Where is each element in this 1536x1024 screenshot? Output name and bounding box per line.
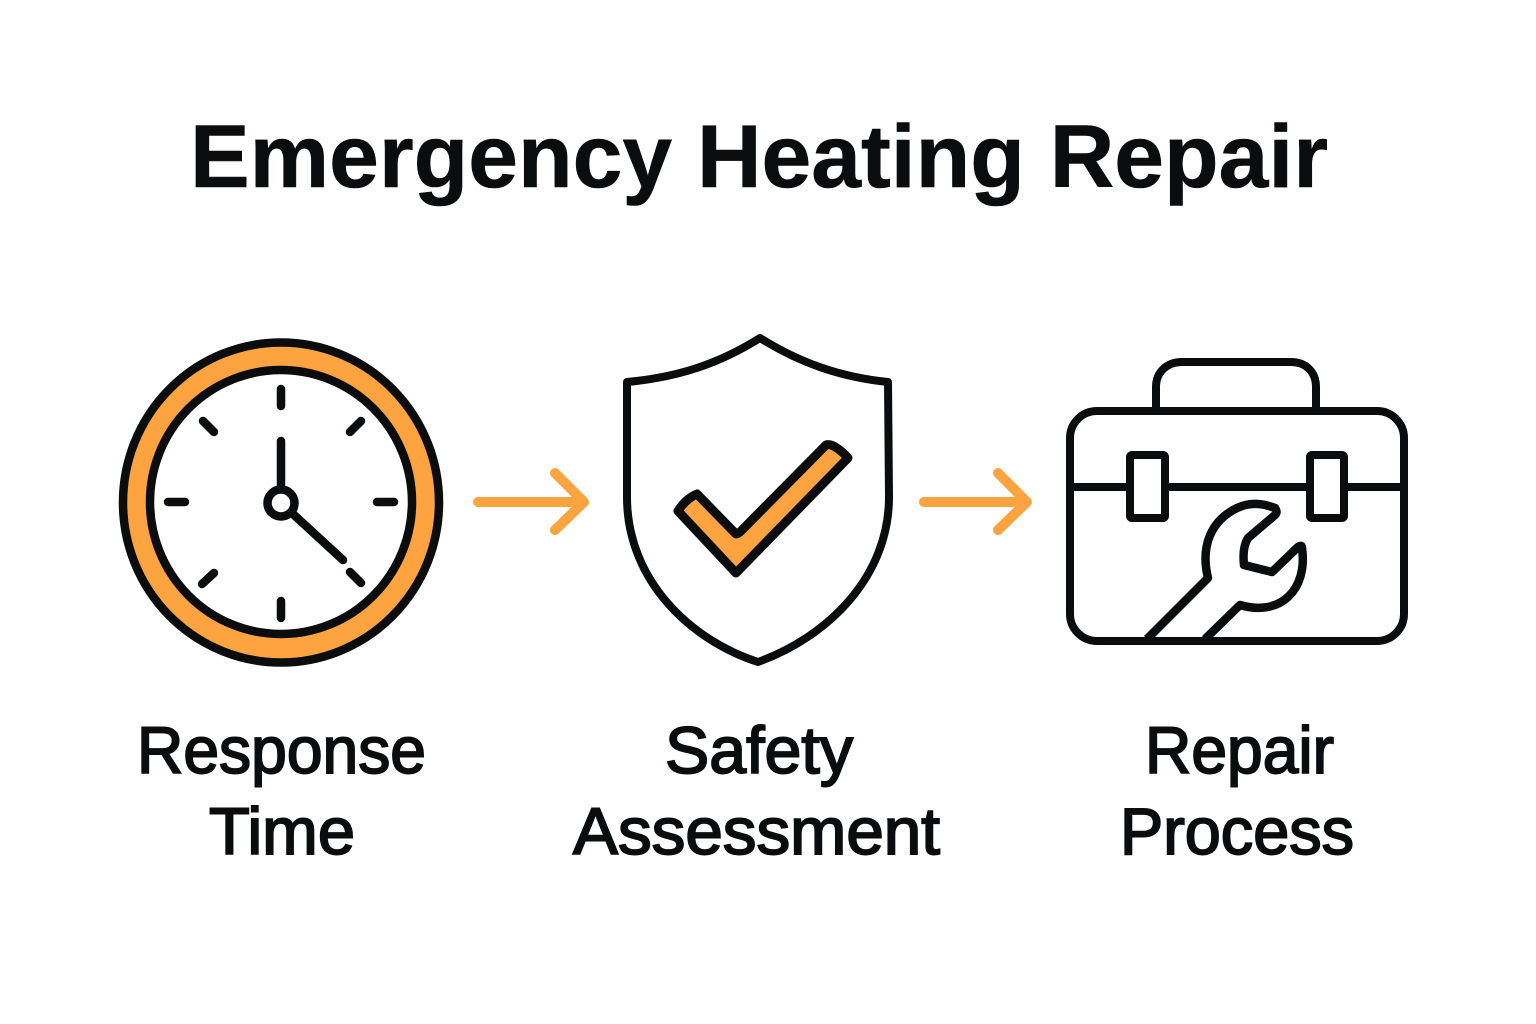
wrench bbox=[1147, 504, 1303, 639]
clock hour ticks bbox=[168, 389, 394, 618]
check mark bbox=[678, 445, 848, 573]
shield outline bbox=[627, 338, 889, 662]
clock orange ring bbox=[123, 342, 439, 662]
clock hub bbox=[268, 490, 294, 516]
label: Repair Process bbox=[1120, 713, 1354, 868]
title: Emergency Heating Repair bbox=[190, 106, 1328, 206]
toolbox handle bbox=[1156, 362, 1316, 411]
label: Safety Assessment: Safety bbox=[665, 713, 853, 787]
icon: shield with check bbox=[627, 338, 889, 662]
label: Response Time: Response bbox=[137, 713, 426, 787]
clock face bbox=[150, 370, 412, 634]
clock hands bbox=[281, 441, 343, 560]
icon: toolbox with wrench bbox=[1070, 362, 1404, 641]
label: Safety Assessment bbox=[573, 713, 940, 868]
icon: clock bbox=[123, 342, 439, 662]
label: Repair Process: Process bbox=[1120, 794, 1354, 868]
left latch bbox=[1130, 455, 1165, 518]
arrow: shield to toolbox bbox=[924, 473, 1027, 530]
label: Response Time bbox=[137, 713, 426, 868]
label: Repair Process: Repair bbox=[1145, 713, 1334, 787]
toolbox body bbox=[1070, 411, 1404, 641]
arrow: clock to shield bbox=[478, 473, 584, 530]
right latch bbox=[1310, 455, 1344, 518]
toolbox lid line bbox=[1070, 483, 1404, 491]
label: Response Time: Time bbox=[209, 794, 355, 868]
label: Safety Assessment: Assessment bbox=[573, 794, 940, 868]
